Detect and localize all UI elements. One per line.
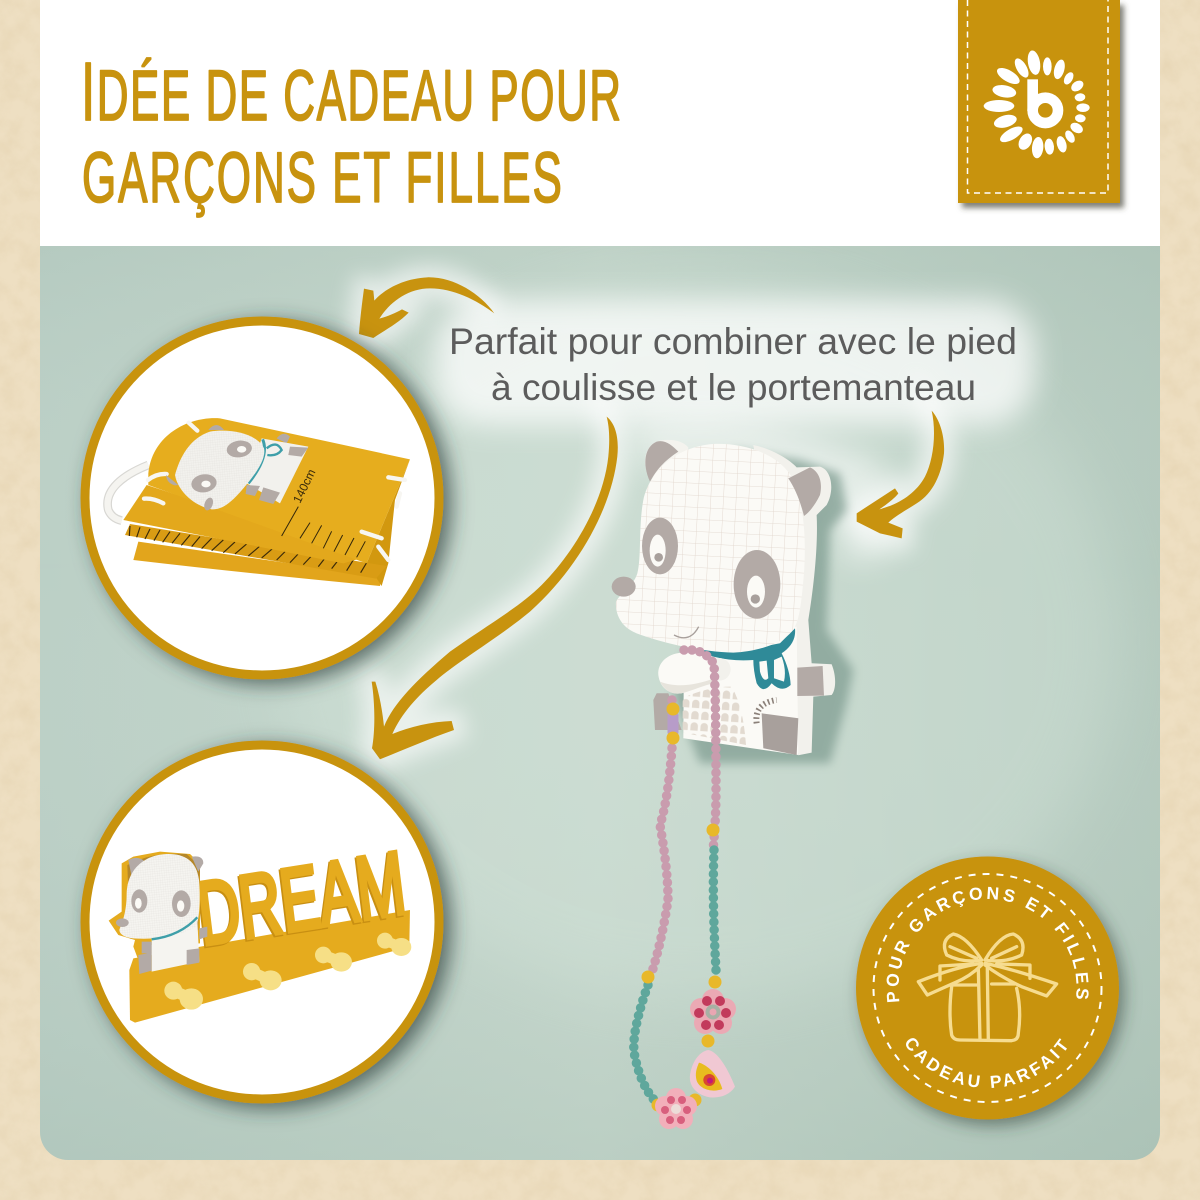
- header band: [40, 0, 1160, 246]
- panel: height chart circle: [85, 321, 439, 675]
- icon: sunflower logo: [984, 49, 1090, 159]
- product: folded height chart: [108, 418, 410, 586]
- charm: heart: [690, 1050, 735, 1097]
- badge: perfect gift: [850, 852, 1134, 1136]
- badge text bottom: CADEAU PARFAIT: [906, 1038, 1067, 1088]
- text block: combine caption: à coulisse et le portemanteau: [491, 367, 976, 408]
- coat knob: [658, 653, 731, 694]
- panel: panda hook photo: [600, 430, 853, 763]
- title: GARÇONS ET FILLES: [82, 138, 562, 218]
- title: [81, 44, 621, 218]
- panda body front: [653, 627, 824, 755]
- coat pegs: [164, 933, 411, 1010]
- panel: wall photo: [40, 246, 1160, 1160]
- product: dream coat rack: [109, 832, 411, 1023]
- panda body side: [753, 445, 835, 755]
- text block: combine caption: Parfait pour combiner avec le pied: [449, 321, 1017, 362]
- panda wall shadow: [673, 450, 853, 763]
- arrow: to panda hook: [857, 411, 944, 538]
- panda ears: [645, 440, 688, 482]
- logo tag: [958, 0, 1120, 203]
- badge text top: POUR GARÇONS ET FILLES: [886, 886, 1089, 1002]
- panel: coat rack circle: [85, 745, 439, 1099]
- panda head: [612, 444, 821, 653]
- arrow: to height chart: [359, 277, 494, 338]
- charm: lower flower: [655, 1088, 697, 1129]
- product: dream coat rack: DREAM: [192, 832, 410, 964]
- necklace: [634, 650, 722, 1112]
- title: IDÉE DE CADEAU POUR: [81, 44, 621, 138]
- icon: gift box: [918, 934, 1057, 1041]
- product: folded height chart: 140cm: [290, 467, 318, 505]
- arrow: to coat rack: [372, 417, 618, 759]
- charm: pink flower: [690, 989, 736, 1034]
- text block: combine caption: [449, 321, 1017, 408]
- product: dream coat rack: DREAM: [191, 834, 409, 965]
